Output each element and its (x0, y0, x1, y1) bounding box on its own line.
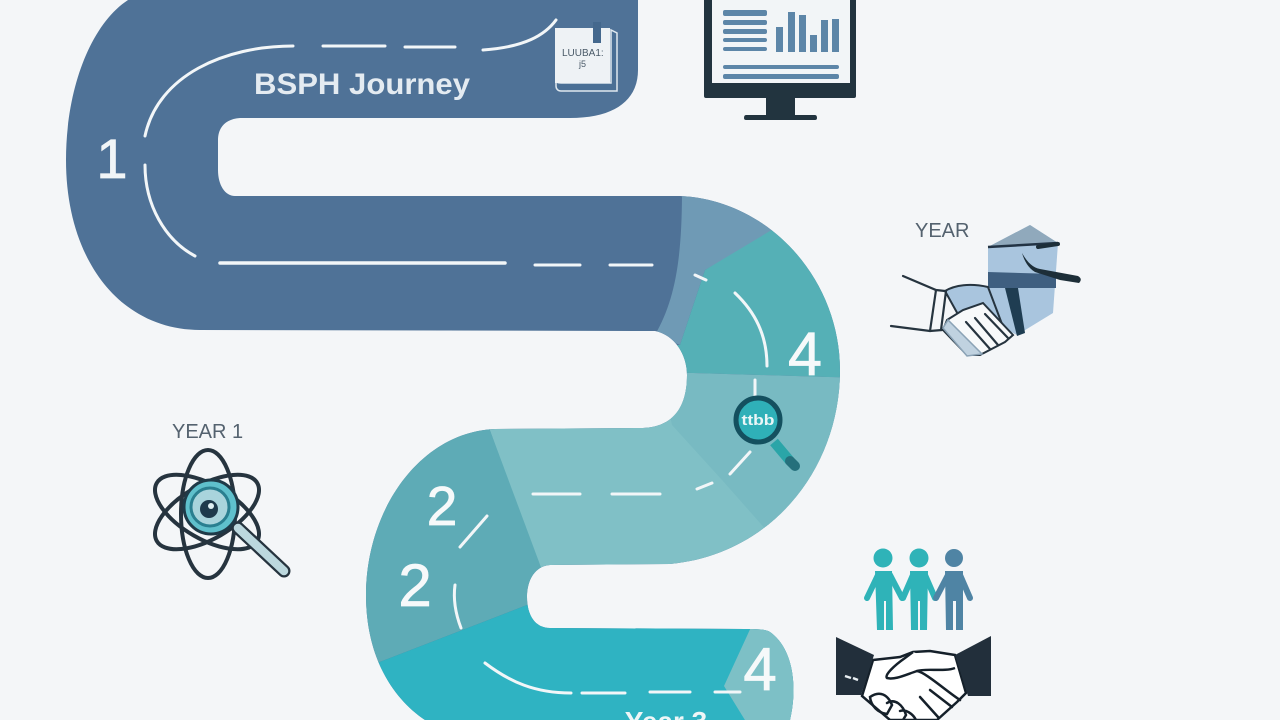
icon: atom with magnifier (143, 450, 284, 578)
step number 2 lower: 2 (398, 552, 432, 619)
icon: graduation box and handshake (891, 225, 1081, 356)
infographic canvas (66, 0, 1081, 720)
label: YEAR 1: YEAR 1 (172, 421, 243, 443)
road segment: dark blue (66, 0, 840, 720)
road segment: teal bend (677, 230, 840, 378)
icon: book: j5 (578, 59, 586, 69)
icon: business handshake (836, 636, 991, 720)
step number 1: 1 (96, 127, 128, 190)
road segment: light teal (490, 374, 840, 568)
road segment: left teal bend (366, 429, 541, 662)
step number 4 upper: 4 (788, 320, 822, 388)
heading: BSPH Journey: BSPH Journey (254, 68, 470, 101)
icon: three people (867, 548, 970, 630)
icon: magnifier on road: ttbb (742, 412, 774, 429)
icon: book (555, 22, 617, 91)
icon: book: LUUBA1: (562, 48, 604, 59)
icon: magnifier on road (736, 398, 795, 466)
road segment: end cap (724, 629, 794, 720)
icon: monitor with charts (704, 0, 856, 120)
road segment: blue bend (657, 196, 772, 345)
winding road (66, 0, 840, 720)
road centre line (145, 20, 767, 693)
step number 2 upper: 2 (427, 475, 457, 537)
road segment: bright teal (372, 600, 800, 720)
step number 4 lower: 4 (743, 636, 777, 703)
road segment: shaded light teal (671, 372, 840, 528)
label: YEAR: YEAR (915, 220, 969, 242)
